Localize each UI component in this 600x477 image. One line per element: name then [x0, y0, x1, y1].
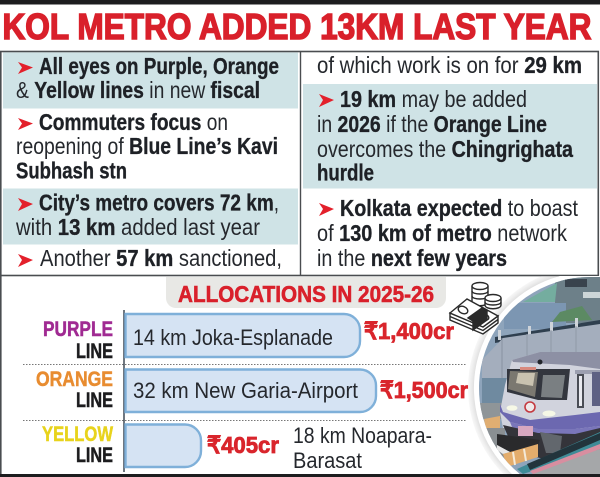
train body — [500, 352, 600, 429]
bullet: another 57 km: Another 57 km sanctioned, — [40, 245, 282, 271]
bullet: commuters: Subhash stn — [16, 158, 127, 184]
bullet: all eyes — [16, 53, 279, 103]
bar label: 14 km Joka-Esplanade — [133, 325, 333, 350]
bullet: kolkata: of 130 km of metro network — [317, 220, 567, 246]
bar label: 18 km Noapara- — [293, 423, 432, 448]
label: purple line — [43, 318, 113, 363]
label: yellow line: LINE — [76, 444, 113, 467]
bullet: city's metro: with 13 km added last year — [15, 214, 260, 240]
frame: lower panel edges — [0, 275, 600, 477]
row divider lines — [23, 364, 467, 366]
bullet: 19 km: 19 km may be added — [340, 86, 527, 112]
heading: allocations: ALLOCATIONS IN 2025-26 — [178, 281, 434, 307]
label: orange line: ORANGE — [36, 368, 113, 391]
bullet: city's metro: City’s metro covers 72 km, — [39, 190, 279, 216]
row: orange line — [36, 368, 468, 412]
bullet: all eyes: & Yellow lines in new fiscal — [16, 77, 260, 103]
value: ₹1,500cr — [380, 377, 468, 403]
value: ₹405cr — [207, 432, 279, 458]
bullet: 19 km: hurdle — [317, 160, 374, 186]
bullet: 19 km — [317, 86, 574, 186]
undercarriage — [503, 425, 600, 458]
bar label: 32 km New Garia-Airport — [133, 378, 359, 403]
label: yellow line — [42, 423, 113, 467]
bullet: commuters: reopening of Blue Line’s Kavi — [16, 133, 278, 159]
bar: purple — [126, 314, 360, 357]
bullet: 19 km: in 2026 if the Orange Line — [317, 111, 547, 137]
top bar — [0, 0, 600, 4]
row: purple line — [43, 314, 454, 363]
label: purple line: LINE — [76, 340, 113, 363]
bar: orange — [126, 370, 376, 412]
bar label — [293, 423, 432, 473]
bullet: 19 km: overcomes the Chingrighata — [317, 136, 574, 162]
label: purple line: PURPLE — [43, 318, 113, 341]
bullet: kolkata: Kolkata expected to boast — [340, 195, 578, 221]
row: yellow line — [42, 423, 432, 473]
bar: yellow — [126, 424, 201, 467]
value: ₹1,400cr — [364, 318, 454, 344]
label: orange line — [36, 368, 113, 412]
bullet: all eyes: All eyes on Purple, Orange — [39, 53, 279, 79]
fence — [503, 444, 538, 467]
left column text — [15, 53, 282, 271]
label: orange line: LINE — [76, 389, 113, 412]
continued: 29 km: of which work is on for 29 km — [317, 52, 582, 78]
bullet: city's metro — [15, 190, 279, 240]
bar label: Barasat — [293, 448, 363, 473]
photo: metro train in circle — [468, 276, 600, 474]
label: yellow line: YELLOW — [42, 423, 113, 446]
bullet: kolkata — [317, 195, 578, 271]
icon: coins and banknotes — [450, 282, 501, 334]
bullet: commuters — [16, 109, 278, 184]
right column text — [317, 52, 582, 271]
bullet: commuters: Commuters focus on — [39, 109, 228, 135]
bullet: kolkata: in the next few years — [317, 245, 507, 271]
panel: key points — [1, 52, 598, 276]
